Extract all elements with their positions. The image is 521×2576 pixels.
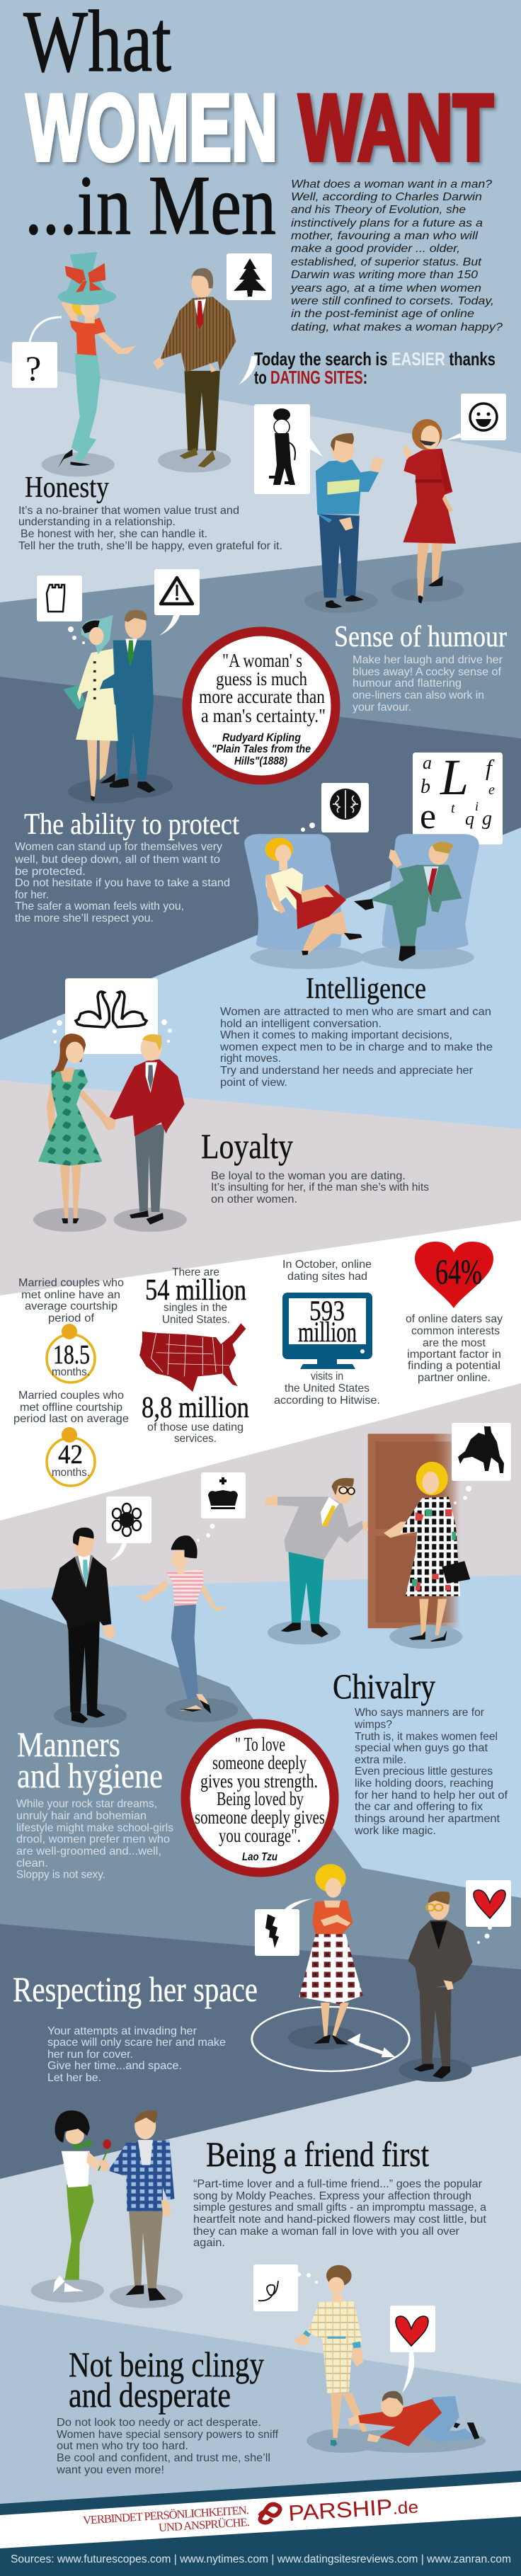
couple: the ability to protect (63, 610, 173, 803)
heading and text: manners and hygiene: lifestyle might make school-girls (16, 1822, 173, 1834)
title: ...in Men (25, 158, 276, 252)
stat: singles in the united states: 8,8 million (142, 1392, 249, 1424)
personal space circle and arrow (252, 2007, 409, 2071)
heading and text: chivalry: like holding doors, reaching (355, 1778, 493, 1790)
heading and text: not being clingy and desperate (56, 2345, 279, 2476)
heading and text: not being clingy and desperate: Women have special sensory powers to sniff (57, 2429, 279, 2441)
subheading: dating sites: to DATING SITES: (254, 367, 367, 388)
quote: lao tzu: gives you strength. (200, 1770, 318, 1792)
heading and text: chivalry: Even precious little gestures (355, 1765, 493, 1778)
speech bubble: chaplin (254, 404, 323, 494)
heading and text: loyalty: on other women. (211, 1193, 297, 1206)
quote: lao tzu: someone deeply gives (195, 1807, 325, 1828)
heading and text: sense of humour: your favour. (353, 702, 411, 714)
speech bubble: swans (52, 978, 172, 1054)
sources: Sources: www.futurescopes.com | www.nytimes.com | www.datingsitesreviews.com | www.zanran.com (11, 2553, 511, 2565)
stat: singles in the united states: of those use dating (147, 1421, 244, 1433)
stat: courtship online: months. (52, 1366, 90, 1378)
heading and text: intelligence: hold an intelligent conversation. (220, 1018, 382, 1030)
heading and text: respecting her space: her run for cover. (47, 2049, 133, 2061)
parship logo band: PARSHIP .de (287, 2493, 419, 2526)
heading and text: being a friend first: song by Moldy Peaches. Express your affection through (193, 2190, 471, 2202)
heading and text: sense of humour: Make her laugh and drive her (353, 654, 503, 666)
man with grey jacket at door (264, 1478, 368, 1644)
speech bubbles: brain and letters: q (465, 808, 474, 829)
quote: rudyard kipling: "A woman' s (222, 650, 302, 671)
speech bubble: crown (197, 1472, 246, 1542)
heading and text: sense of humour: blues away! A cocky sense of (353, 666, 502, 678)
heading and text: respecting her space: Respecting her space (13, 1969, 258, 2009)
stat: courtship offline (13, 1390, 129, 1486)
heading and text: manners and hygiene: Sloppy is not sexy. (16, 1869, 105, 1881)
heading and text: chivalry: for her hand to help her out of (355, 1790, 508, 1802)
map of the united states (139, 1323, 246, 1392)
speech bubbles: brain and letters: g (482, 808, 492, 830)
heading and text: being a friend first: they can make a woman fall in love with you all over (193, 2226, 460, 2238)
man in dark suit (399, 1891, 472, 2082)
speech bubble: question mark (12, 317, 62, 388)
speech bubbles: brain and letters: i (475, 799, 479, 813)
stat: heart 64 percent: of online daters say (406, 1313, 503, 1325)
speech bubbles: brain and letters: L (440, 749, 469, 806)
heading and text: chivalry: Chivalry (333, 1666, 435, 1706)
heading and text: being a friend first: “Part-time lover and a full-time friend...” goes the popular (193, 2178, 483, 2190)
stat: heart 64 percent: important factor in (407, 1349, 501, 1361)
heading and text: manners and hygiene: Manners (17, 1724, 120, 1764)
heading and text: intelligence: Try and understand her needs and appreciate her (220, 1065, 474, 1077)
speech bubbles: brain and letters: t (451, 801, 455, 816)
stat: courtship online: period of (48, 1312, 95, 1324)
heading and text: the ability to protect: Women can stand up for themselves very (15, 841, 222, 853)
heading and text: respecting her space: Give her time...and space. (47, 2060, 182, 2072)
stat: courtship offline: met offline courtship (20, 1402, 122, 1414)
speech bubbles: rook and warning (37, 569, 200, 644)
quote: lao tzu: " To love (235, 1734, 285, 1755)
stat: singles in the united states: services. (174, 1433, 217, 1445)
heading and text: honesty (18, 471, 282, 552)
heading and text: intelligence (219, 973, 493, 1089)
speech bubbles: brain and letters: b (420, 776, 430, 798)
stat: courtship online: Married couples who (18, 1277, 124, 1289)
parship logo band: UND ANSPRÜCHE. (158, 2515, 250, 2534)
speech bubble: smiley (446, 394, 506, 440)
heading and text: chivalry: Who says manners are for (355, 1707, 485, 1719)
stat: heart 64 percent (406, 1242, 503, 1384)
stat: heart 64 percent: partner online. (418, 1372, 491, 1384)
intro text: were still confined to corsets. Today, (291, 295, 494, 307)
heading and text: intelligence: women expect men to be in charge and to make the (219, 1041, 493, 1053)
angry woman (299, 1864, 363, 2044)
heading and text: sense of humour: one-liners can also work in (353, 689, 484, 702)
quote: rudyard kipling: Rudyard Kipling (222, 732, 301, 744)
parship logo band: VERBINDET PERSÖNLICHKEITEN. (83, 2503, 249, 2527)
heading and text: respecting her space: space will only scare her and make (47, 2037, 226, 2049)
stat: monitor visits: dating sites had (287, 1271, 367, 1283)
heading and text: manners and hygiene: and hygiene (17, 1756, 163, 1795)
quote: rudyard kipling: "Plain Tales from the (212, 743, 311, 755)
couple with rose (31, 2110, 183, 2308)
man in brown suit (153, 268, 236, 472)
quote: lao tzu (185, 1724, 334, 1872)
heading and text: loyalty: It’s insulting for her, if the man she’s with hits (211, 1181, 429, 1193)
parship logo band (83, 2493, 419, 2539)
heading and text: intelligence: Women are attracted to men who are smart and can (220, 1006, 491, 1018)
speech bubbles: brain and letters (295, 749, 503, 845)
heading and text: the ability to protect: be protected. (15, 866, 86, 878)
woman in red dress (391, 419, 464, 604)
speech bubbles: brain and letters: f (486, 755, 495, 780)
intro text: instinctively plans for a future as a (291, 217, 483, 229)
quote: rudyard kipling: more accurate than (199, 686, 325, 707)
heading and text: chivalry: things around her apartment (355, 1813, 500, 1825)
heading and text: chivalry: Truth is, it makes women feel (355, 1731, 498, 1743)
heading and text: chivalry: wimps? (354, 1719, 392, 1731)
heading and text: respecting her space: Your attempts at invading her (47, 2025, 197, 2037)
speech bubble: knight (452, 1423, 511, 1504)
heading and text: the ability to protect: The safer a woman feels with you, (15, 900, 184, 912)
intro text: dating, what makes a woman happy? (291, 321, 503, 333)
heading and text: respecting her space: Let her be. (47, 2072, 101, 2084)
heading and text: not being clingy and desperate: Be cool and confident, and trust me, she’ll (57, 2452, 270, 2464)
speech bubbles: brain and letters: a (423, 752, 432, 773)
stat: monitor visits: 593 (309, 1295, 345, 1327)
stat: courtship offline: Married couples who (18, 1390, 124, 1402)
stat: monitor visits: the United States (285, 1383, 370, 1395)
intro text (290, 178, 503, 333)
heading and text: honesty: Tell her the truth, she’ll be happy, even grateful for it. (18, 540, 282, 552)
quote: rudyard kipling (187, 631, 336, 780)
heading and text: not being clingy and desperate: Not being clingy (69, 2345, 264, 2384)
speech bubble: christmas tree (227, 253, 272, 384)
heading and text: honesty: Be honest with her, she can handle it. (21, 528, 207, 540)
quote: rudyard kipling: Hills"(1888) (234, 755, 287, 767)
heading and text: the ability to protect (14, 808, 239, 925)
speech bubble: question mark: ? (25, 348, 41, 388)
title: WOMEN (26, 76, 277, 181)
stat: courtship offline: 42 (58, 1440, 83, 1470)
stat: monitor visits: In October, online (282, 1259, 372, 1271)
heading and text: chivalry: extra mile. (355, 1754, 406, 1766)
stat: monitor visits: million (298, 1316, 357, 1348)
heading and text: chivalry: special when guys go that (355, 1742, 488, 1754)
heading and text: honesty: It’s a no-brainer that women value trust and (18, 505, 239, 517)
man in blue sweater (304, 433, 384, 613)
heading and text: sense of humour (334, 621, 507, 714)
heading and text: manners and hygiene: clean. (16, 1857, 48, 1870)
heading and text: honesty: Honesty (25, 471, 109, 504)
intro text: Darwin was writing more than 150 (291, 269, 478, 281)
standing woman (294, 2265, 380, 2453)
heading and text: loyalty (201, 1126, 429, 1206)
heading and text: manners and hygiene: are well-groomed and...well, (16, 1845, 161, 1857)
heading and text: intelligence: point of view. (220, 1077, 287, 1089)
stat: singles in the united states: There are (172, 1266, 219, 1278)
woman with teal hat (42, 252, 136, 476)
stat: courtship online: average courtship (25, 1300, 118, 1312)
heading and text: manners and hygiene: unruly hair and bohemian (16, 1810, 147, 1822)
heading and text: not being clingy and desperate: Do not look too needy or act desperate. (57, 2417, 261, 2429)
heading and text: chivalry: work like magic. (354, 1825, 436, 1837)
title (23, 0, 493, 252)
heading and text: not being clingy and desperate: and desperate (69, 2375, 231, 2415)
speech bubble: flower (106, 1496, 151, 1561)
stat: heart 64 percent: are the most (423, 1337, 486, 1349)
heading and text: intelligence: right moves. (220, 1053, 281, 1065)
speech bubble: scribble (253, 2265, 318, 2311)
stat: singles in the united states (142, 1266, 249, 1445)
heading and text: loyalty: Loyalty (201, 1126, 293, 1166)
heading and text: the ability to protect: for her. (15, 889, 49, 901)
stat: courtship online: met online have an (21, 1289, 120, 1301)
quote: lao tzu: Being loved by (217, 1788, 304, 1809)
subheading: dating sites: Today the search is EASIER thanks (254, 348, 496, 370)
heading and text: not being clingy and desperate: want you even more! (56, 2464, 164, 2476)
heading and text: intelligence: When it comes to making important decisions, (220, 1029, 452, 1041)
speech bubble: heart (466, 1880, 511, 1944)
heading and text: chivalry: the car and offering to fix (355, 1801, 483, 1813)
heading and text: the ability to protect: the more she’ll respect you. (15, 912, 154, 925)
stat: singles in the united states: singles in the (164, 1302, 227, 1314)
heading and text: honesty: understanding in a relationship. (18, 516, 176, 528)
heading and text: being a friend first: again. (193, 2237, 225, 2249)
intro text: mother, favouring a man who will (291, 230, 479, 242)
stat: monitor visits: visits in (311, 1370, 343, 1383)
speech bubble: lightning (255, 1899, 313, 1956)
woman with patterned dress at door (384, 1462, 470, 1649)
woman in pink striped top (134, 1535, 239, 1722)
quote: rudyard kipling: guess is much (216, 668, 307, 689)
quote: rudyard kipling: a man's certainty." (201, 705, 326, 726)
seated couple: intelligence (244, 834, 479, 969)
stat: courtship offline: period last on average (13, 1413, 129, 1425)
couple: loyalty (33, 1034, 187, 1232)
heading and text: the ability to protect: The ability to protect (24, 808, 239, 841)
heading and text: chivalry (333, 1666, 508, 1837)
heading and text: manners and hygiene: While your rock star dreams, (16, 1798, 157, 1810)
heading and text: manners and hygiene (16, 1724, 173, 1881)
stat: singles in the united states: United States. (162, 1314, 230, 1326)
heading and text: loyalty: Be loyal to the woman you are dating. (211, 1170, 406, 1182)
heading and text: the ability to protect: Do not hesitate if you have to take a stand (15, 877, 230, 889)
stat: heart 64 percent: common interests (411, 1325, 500, 1337)
subheading: dating sites (254, 348, 496, 388)
stat: courtship online: 18.5 (53, 1340, 90, 1370)
heading and text: respecting her space (13, 1969, 258, 2084)
intro text: What does a woman want in a man? (291, 178, 492, 190)
heading and text: being a friend first: simple gestures and small gifts - an impromptu massage, a (193, 2202, 486, 2214)
intro text: make a good provider ... older, (291, 243, 460, 255)
heading and text: being a friend first: heartfelt note and hand-picked flowers may cost little, but (193, 2214, 487, 2226)
door (368, 1433, 461, 1628)
stat: courtship offline: months. (52, 1467, 90, 1479)
heading and text: not being clingy and desperate: out men who try too hard. (57, 2440, 188, 2452)
heading and text: sense of humour: humour and flattering (353, 677, 462, 689)
intro text: established, of superior status. But (291, 256, 482, 268)
stat: monitor visits (274, 1259, 380, 1407)
stat: singles in the united states: 54 million (145, 1274, 246, 1307)
quote: lao tzu: someone deeply (212, 1752, 307, 1773)
quote: lao tzu: Lao Tzu (242, 1851, 277, 1863)
heading and text: being a friend first (193, 2134, 487, 2249)
stat: courtship online (18, 1277, 124, 1383)
stat: heart 64 percent: finding a potential (408, 1360, 500, 1372)
man in black suit (52, 1528, 127, 1728)
heading and text: intelligence: Intelligence (306, 973, 426, 1005)
intro text: and his Theory of Evolution, she (291, 204, 466, 216)
heading and text: being a friend first: Being a friend first (206, 2134, 429, 2174)
intro text: Well, according to Charles Darwin (291, 191, 482, 203)
speech bubble: heart two (390, 2306, 435, 2393)
heading and text: the ability to protect: well, but deep down, all of them want to (14, 854, 220, 866)
intro text: in the post-feminist age of online (291, 308, 474, 320)
crawling man (338, 2391, 486, 2453)
heading and text: manners and hygiene: drool, women prefer men who (16, 1833, 170, 1845)
speech bubbles: brain and letters: e (488, 782, 495, 798)
stat: monitor visits: according to Hitwise. (274, 1395, 380, 1407)
stat: heart 64 percent: 64% (435, 1252, 482, 1291)
quote: lao tzu: you courage". (219, 1825, 301, 1846)
intro text: years ago, at a time when women (290, 282, 481, 294)
speech bubbles: brain and letters: e (420, 796, 436, 837)
